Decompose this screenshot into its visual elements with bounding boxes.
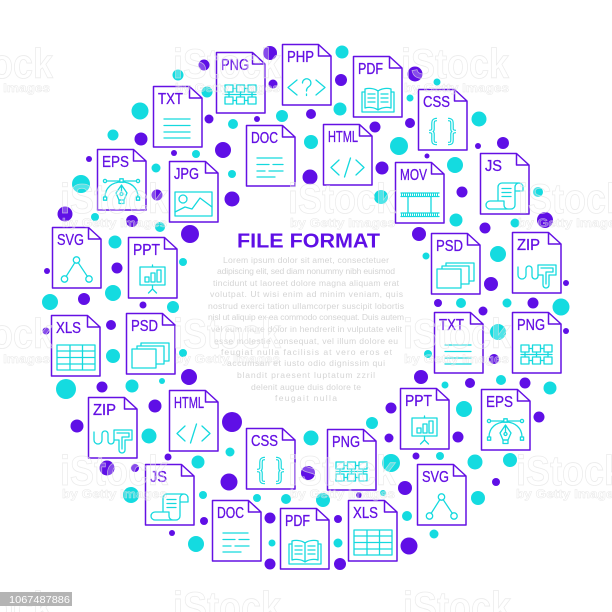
file icon: XLS bottom: XLS [353, 505, 378, 522]
file icon: ZIP left: ZIP [93, 402, 116, 419]
image id tag [0, 592, 72, 606]
file icon: CSS top [418, 90, 467, 150]
file icon: PHP: PHP [287, 49, 314, 66]
file icon: SVG left [52, 228, 101, 288]
file icon: PNG right: PNG [517, 317, 545, 334]
body paragraph [208, 255, 404, 403]
file icon: JPG: JPG [174, 166, 199, 183]
file icon: PDF top [354, 56, 402, 117]
body paragraph: accumsan et iusto odio dignissim qui [227, 358, 385, 368]
body paragraph: adipiscing elit, sed diam nonummy nibh euismod [217, 266, 395, 276]
file icon: HTML top [324, 124, 372, 185]
file icon: PPT right [400, 388, 449, 449]
file icon: JS bottom [146, 464, 194, 525]
body paragraph: esse molestie consequat, vel illum dolore eu [214, 336, 398, 346]
file icon: DOC bottom: DOC [217, 505, 244, 522]
body paragraph: tincidunt ut laoreet dolore magna aliquam erat [213, 278, 400, 288]
body paragraph: nostrud exerci tation ullamcorper suscipit lobortis [208, 301, 404, 311]
file icon: PNG bottom: PNG [332, 434, 360, 451]
decorative purple dots [42, 46, 569, 570]
file icon: EPS right: EPS [486, 394, 513, 411]
file icon: PNG top [216, 52, 265, 113]
body paragraph: blandit praesent luptatum zzril [237, 370, 375, 380]
file icon: PNG top: PNG [221, 57, 249, 74]
watermark: iStock by Getty Images grid: by Getty Images [404, 81, 509, 95]
file icon: PDF bottom: PDF [285, 513, 310, 530]
watermark: iStock by Getty Images grid: by Getty Images [290, 216, 395, 230]
watermark: iStock by Getty Images grid: iStock [173, 40, 282, 87]
file icon: ZIP right [512, 232, 561, 293]
file icon: ZIP left [88, 398, 137, 458]
file icon: PPT right: PPT [405, 393, 432, 410]
body paragraph: feugait nulla [275, 393, 337, 403]
file icon: CSS bottom [246, 428, 295, 489]
watermark: iStock by Getty Images grid: iStock [60, 175, 169, 222]
watermark: iStock by Getty Images grid: iStock [403, 310, 512, 357]
watermark: iStock by Getty Images grid: iStock [60, 447, 169, 494]
file icon: PSD left [126, 314, 175, 374]
file icon: PDF bottom [280, 508, 329, 569]
file icon: ZIP right: ZIP [517, 237, 540, 254]
title: FILE FORMAT [237, 231, 380, 253]
file icon: PSD right: PSD [436, 238, 463, 255]
file icon: PHP [282, 44, 331, 105]
file icon: DOC top: DOC [251, 130, 278, 147]
file icon: PPT left: PPT [133, 242, 160, 259]
watermark: iStock by Getty Images grid: iStock [173, 310, 282, 357]
file icon: XLS left [52, 316, 100, 376]
file icon: PDF top: PDF [358, 61, 383, 78]
file icon: EPS right [482, 390, 530, 450]
watermark: iStock by Getty Images grid: by Getty Images [404, 352, 509, 366]
file icon: PSD right [432, 234, 480, 294]
file icon: MOV: MOV [400, 167, 427, 184]
body paragraph: feugiat nulla facilisis at vero eros et [221, 347, 393, 357]
file icon: SVG left: SVG [57, 232, 84, 249]
watermark: iStock by Getty Images grid: by Getty Images [290, 487, 395, 501]
file icon: XLS left: XLS [56, 320, 81, 337]
decorative cyan dots [42, 46, 570, 552]
body paragraph: Lorem ipsum dolor sit amet, consectetuer [223, 255, 389, 265]
watermark: iStock by Getty Images grid: by Getty Images [62, 487, 167, 501]
file icon: SVG bottom [418, 464, 466, 525]
file icon: SVG bottom: SVG [422, 469, 449, 486]
file icon: CSS top: CSS [423, 94, 450, 111]
watermark: iStock by Getty Images grid: by Getty Images [516, 487, 612, 501]
file icon: DOC top [246, 126, 295, 186]
file icon: PNG right [512, 312, 561, 373]
file icon: EPS left [98, 150, 146, 210]
file icon: EPS left: EPS [102, 154, 129, 171]
file icon: TXT right [434, 312, 483, 373]
file icon: TXT top: TXT [158, 91, 183, 108]
watermark: iStock by Getty Images grid: by Getty Images [62, 216, 167, 230]
file icon: JPG [170, 162, 218, 222]
file icon: TXT top [154, 86, 202, 147]
file icon: JS right [480, 154, 529, 214]
file icon: HTML bottom [170, 390, 218, 451]
image id tag: 1067487886 [9, 594, 70, 606]
body paragraph: vel eum iriure dolor in hendrerit in vulputate velit [211, 324, 403, 334]
body paragraph: volutpat. Ut wisi enim ad minim veniam, quis [210, 289, 403, 299]
file icon: TXT right: TXT [439, 317, 464, 334]
file icon: XLS bottom [348, 500, 397, 561]
watermark: iStock by Getty Images grid: iStock [288, 175, 397, 222]
file icon: PNG bottom [328, 430, 376, 490]
watermark: iStock by Getty Images grid: by Getty Images [518, 216, 612, 230]
file icon: MOV [396, 162, 444, 223]
body paragraph: nisl ut aliquip ex ea commodo consequat. Duis autem [208, 312, 404, 322]
file icon: HTML bottom: HTML [174, 395, 204, 412]
watermark: iStock by Getty Images grid: iStock [401, 40, 510, 87]
watermark: iStock by Getty Images grid: iStock [288, 447, 397, 494]
watermark: iStock by Getty Images grid: by Getty Images [175, 352, 280, 366]
watermark: iStock by Getty Images grid: by Getty Images [175, 81, 280, 95]
file icon: DOC bottom [212, 500, 261, 561]
file icon: HTML top: HTML [328, 129, 358, 146]
file icon: PPT left [128, 238, 177, 298]
file icon: PSD left: PSD [131, 318, 158, 335]
file icon: CSS bottom: CSS [251, 433, 278, 450]
file icon: JS right: JS [485, 158, 502, 175]
file icon: JS bottom: JS [150, 469, 167, 486]
body paragraph: delenit augue duis dolore te [251, 382, 361, 392]
